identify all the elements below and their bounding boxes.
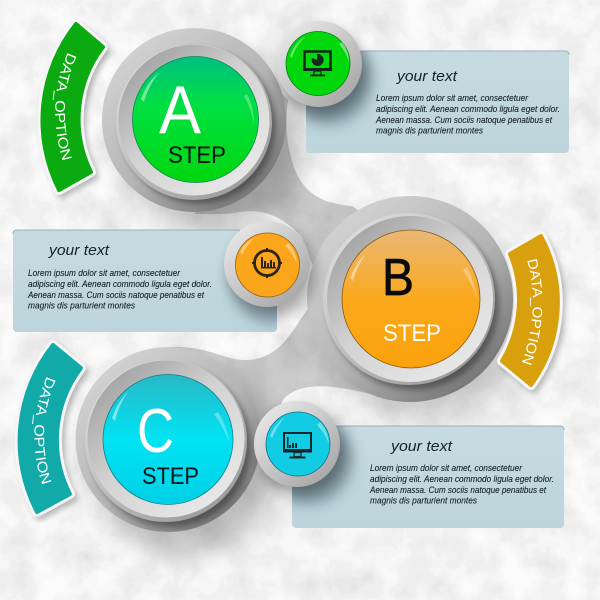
panel: B text (12, 230, 277, 332)
body: A: magnis dis parturient montes (376, 126, 483, 136)
connector band A to B (195, 60, 430, 310)
step C circle (76, 347, 260, 532)
body: A: adipiscing elit. Aenean commodo ligula eget dolor. (376, 104, 560, 114)
letter C: C (137, 397, 174, 466)
letter B: B (382, 249, 414, 307)
body: C: Lorem ipsum dolor sit amet, consectetuer (370, 463, 523, 473)
heading: C: your text (390, 438, 453, 455)
panel: C text (292, 426, 564, 528)
small circle B with icon (224, 221, 315, 315)
panel: A text (306, 50, 570, 153)
icon: target with bar chart (252, 248, 282, 278)
body: C: magnis dis parturient montes (370, 496, 477, 506)
label: DATA_OPTION (32, 377, 56, 484)
body: A: Lorem ipsum dolor sit amet, consectetuer (376, 93, 529, 103)
soft shadows (94, 50, 524, 554)
heading: A: your text (396, 68, 458, 85)
body: B: Aenean massa. Cum sociis natoque penatibus et (27, 290, 204, 300)
body: A (375, 93, 560, 136)
badge B: data option (497, 234, 568, 396)
connector band B to C (170, 285, 420, 450)
body: A: Aenean massa. Cum sociis natoque penatibus et (375, 115, 552, 125)
body: C: adipiscing elit. Aenean commodo ligula eget dolor. (370, 474, 554, 484)
icon: monitor with bars (283, 433, 312, 458)
badge A: data option (40, 22, 113, 201)
body: B (27, 268, 212, 310)
body: C (369, 463, 554, 506)
label STEP: STEP (168, 142, 226, 169)
letter A: A (159, 72, 202, 148)
body: C: Aenean massa. Cum sociis natoque penatibus et (369, 485, 546, 495)
small circle A with icon (276, 21, 366, 115)
body: B: Lorem ipsum dolor sit amet, consectetuer (28, 268, 181, 278)
step B circle (307, 196, 513, 402)
label: DATA_OPTION (52, 53, 76, 160)
body: B: magnis dis parturient montes (28, 300, 135, 310)
step A circle (102, 28, 286, 212)
label STEP: STEP (142, 463, 199, 490)
badge C: data option (17, 340, 91, 523)
small circle C with icon (254, 401, 345, 495)
label STEP: STEP (383, 320, 441, 347)
label: DATA_OPTION (522, 259, 542, 365)
body: B: adipiscing elit. Aenean commodo ligula eget dolor. (28, 279, 212, 289)
heading: B: your text (48, 242, 110, 259)
icon: monitor with pie chart (303, 52, 332, 76)
